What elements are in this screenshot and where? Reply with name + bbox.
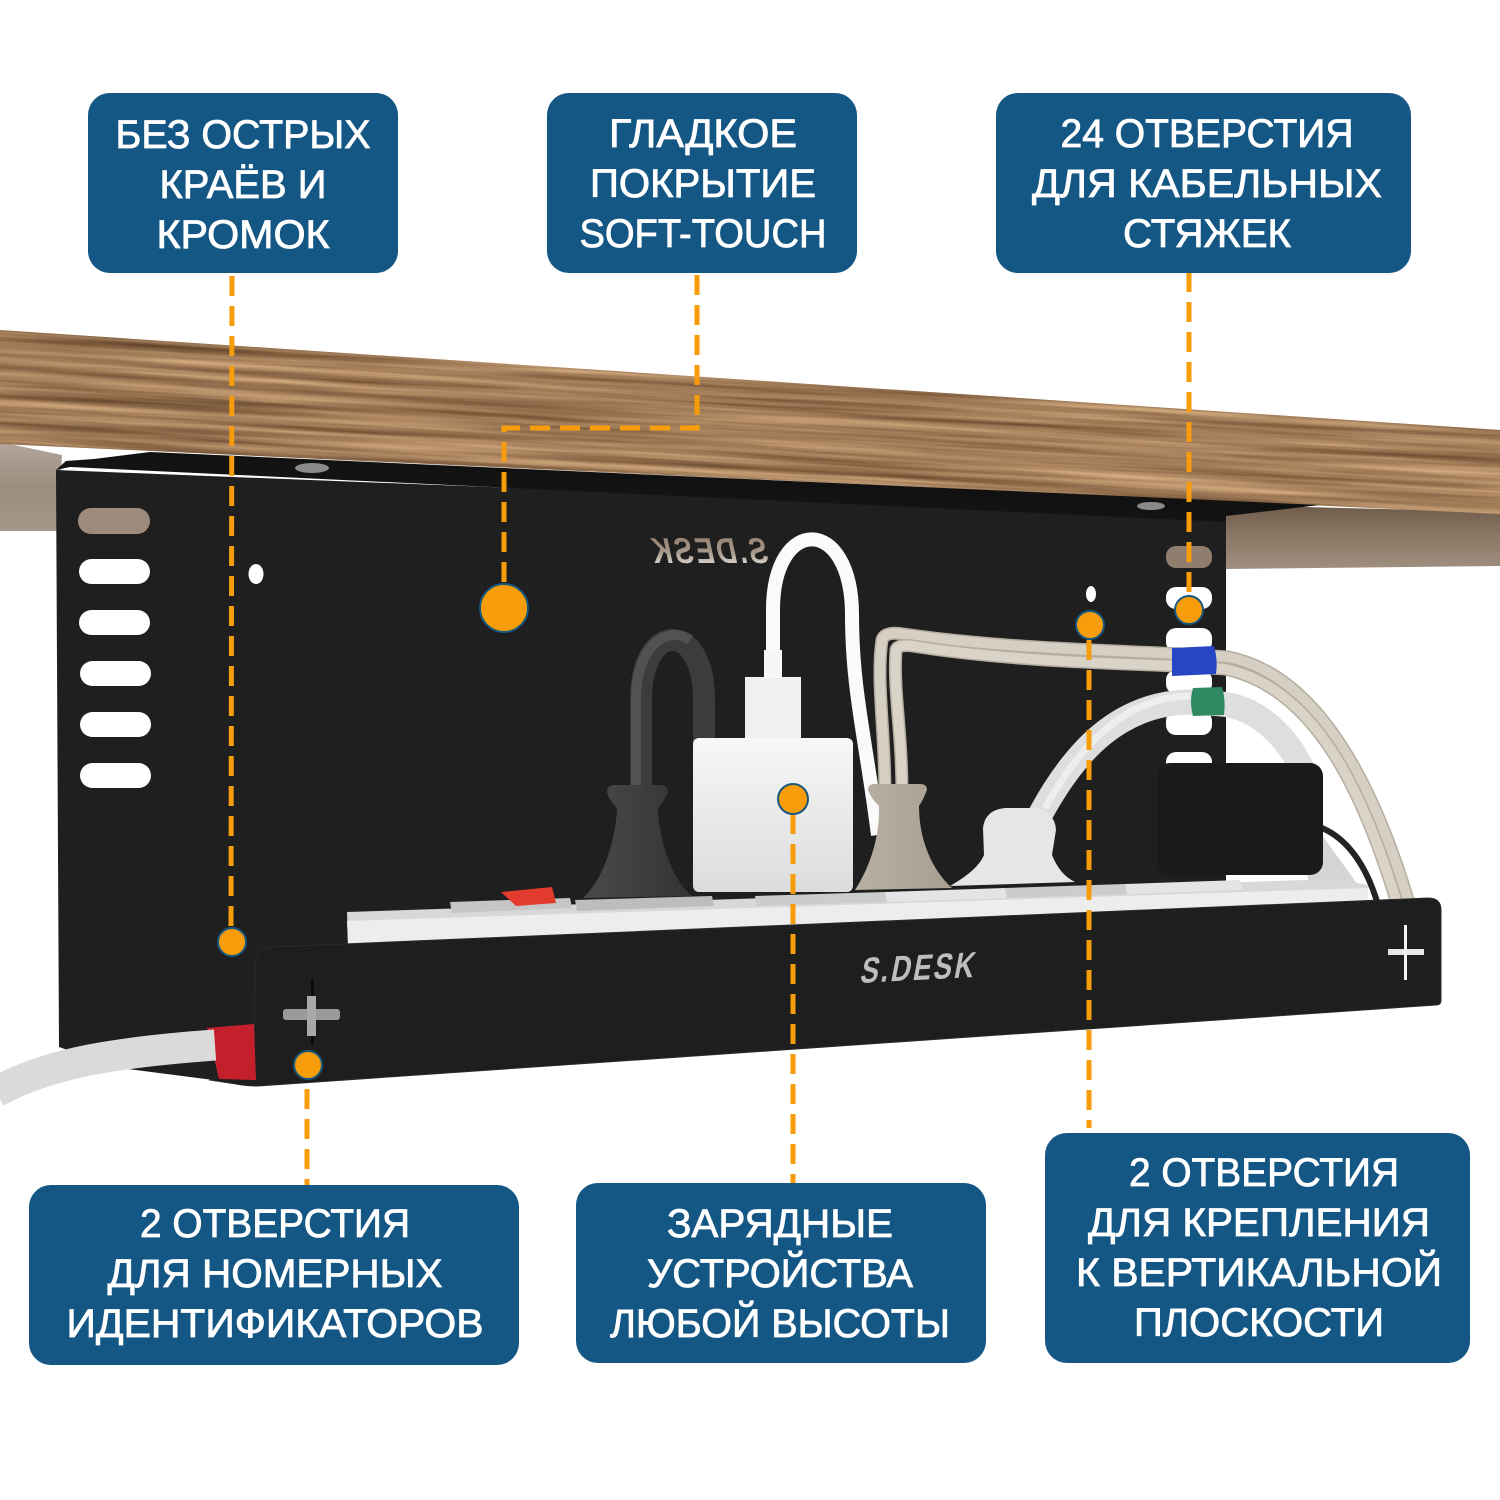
left cross slot [283,979,340,1045]
callout: identifier holes: 2 ОТВЕРСТИЯ [140,1202,410,1246]
thin black cable [1322,828,1378,905]
callout: vertical mounting holes: ДЛЯ КРЕПЛЕНИЯ [1088,1201,1430,1245]
callout: 24 cable tie holes [996,93,1411,273]
dark plug [583,785,692,898]
leader line: no sharp edges [218,276,246,956]
white charger with USB plug [693,650,853,892]
cut-out logo on back panel: S.DESK [645,530,772,571]
front tray of bracket [210,898,1441,1086]
leader line: chargers [778,784,808,1184]
white power cable [0,1045,215,1092]
callout: soft-touch coating: ГЛАДКОЕ [609,112,797,156]
vertical mounting holes [248,564,1096,602]
callout: no sharp edges [88,93,398,273]
callout: vertical mounting holes: 2 ОТВЕРСТИЯ [1129,1151,1399,1195]
callout: no sharp edges: КРОМОК [156,213,330,257]
white cable with green tie [1040,696,1305,815]
black cable loop [636,635,704,800]
desk tabletop underside [0,442,1500,569]
green cable tie [1191,687,1225,716]
leader line: identifier holes [294,1051,322,1186]
callout: vertical mounting holes: К ВЕРТИКАЛЬНОЙ [1076,1249,1442,1295]
red cable clip [207,1024,256,1080]
callout: chargers of any height: ЛЮБОЙ ВЫСОТЫ [610,1300,950,1346]
white round plug [950,808,1075,886]
leader line: vertical mounting holes [1076,611,1104,1128]
callout: no sharp edges: БЕЗ ОСТРЫХ [116,113,370,157]
callout: vertical mounting holes [1045,1133,1470,1363]
black metal bracket back panel [56,452,1320,1086]
wooden desk tabletop [0,330,1500,514]
left cable tie slots [78,508,151,788]
callout: 24 cable tie holes: ДЛЯ КАБЕЛЬНЫХ [1032,162,1382,206]
leader line: soft-touch coating [480,275,697,632]
beige double cable [880,633,1408,900]
callout: soft-touch coating [547,93,857,273]
callout: no sharp edges: КРАЁВ И [160,163,326,207]
power strip [347,830,1368,945]
callout: chargers of any height: УСТРОЙСТВА [647,1250,913,1296]
callout: soft-touch coating: ПОКРЫТИЕ [590,162,816,206]
blue cable tie [1172,646,1217,676]
leader line: cable tie holes [1175,272,1203,624]
callout: chargers of any height [576,1183,986,1363]
front tray logo: S.DESK [857,944,981,991]
mounting screws [295,463,1165,510]
callout: identifier holes [29,1185,519,1365]
right cable tie slots [1166,546,1212,776]
white USB cable [773,539,878,835]
callout: chargers of any height: ЗАРЯДНЫЕ [667,1202,893,1246]
red power switch [501,887,556,906]
right cross slot [1388,925,1424,980]
callout: soft-touch coating: SOFT-TOUCH [580,212,826,256]
callout: identifier holes: ДЛЯ НОМЕРНЫХ [108,1252,442,1296]
callout: vertical mounting holes: ПЛОСКОСТИ [1134,1301,1384,1345]
callout: 24 cable tie holes: 24 ОТВЕРСТИЯ [1060,112,1354,156]
callout: identifier holes: ИДЕНТИФИКАТОРОВ [66,1302,484,1346]
callout: 24 cable tie holes: СТЯЖЕК [1123,212,1292,256]
beige plug [855,784,952,890]
black adapter box [1157,763,1323,875]
